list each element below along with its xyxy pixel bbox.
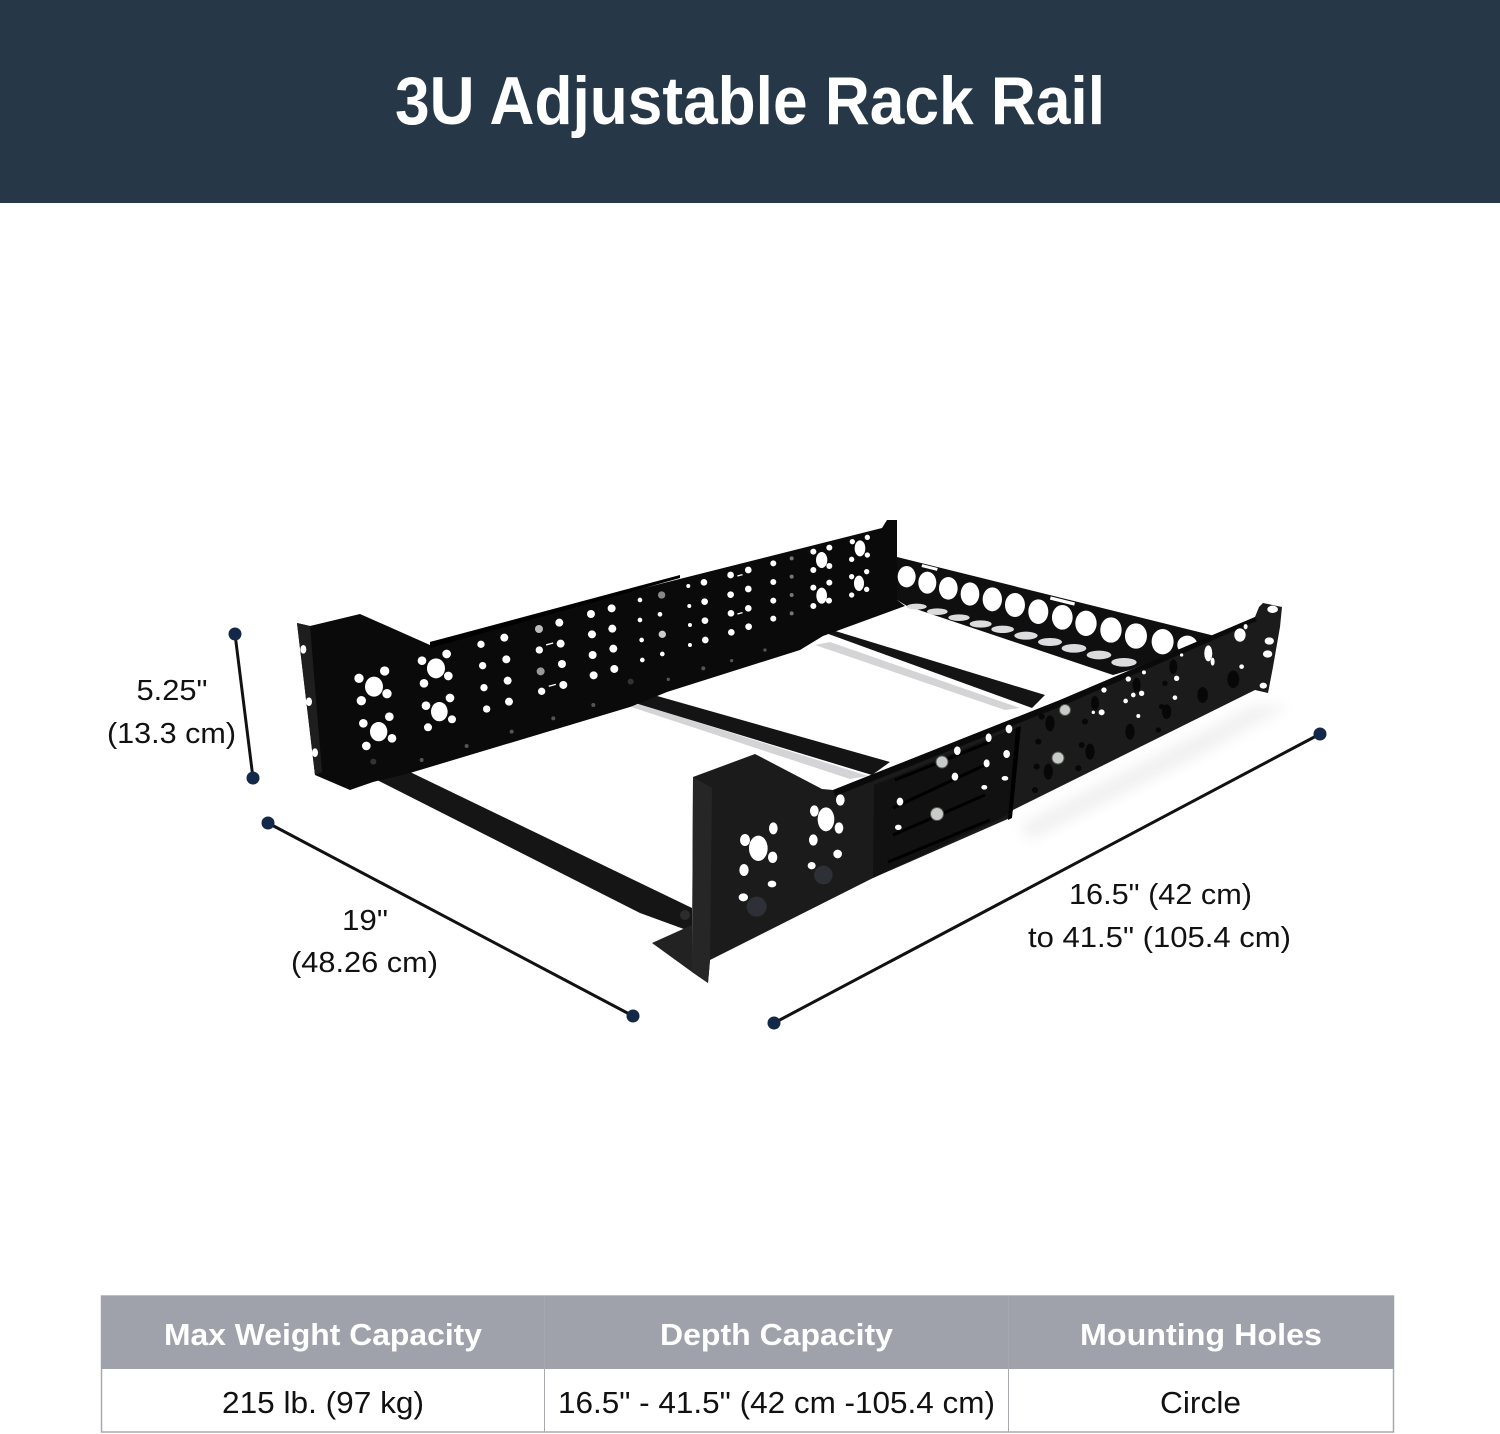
depth dimension: 16.5" (42 cm) <box>1069 879 1252 911</box>
round holes <box>898 564 1197 667</box>
table header row: Mounting Holes <box>1080 1317 1322 1352</box>
width dimension: (48.26 cm) <box>291 947 438 979</box>
width dimension: 19" <box>342 905 388 937</box>
front right rail <box>680 603 1282 983</box>
product illustration: rack rail <box>297 520 1290 983</box>
table header row <box>101 1296 1394 1369</box>
left rail ear flange <box>297 623 322 775</box>
left rail holes <box>300 560 776 757</box>
front base tab <box>652 925 692 972</box>
left rail far holes <box>790 535 870 615</box>
height dimension: (13.3 cm) <box>107 718 236 750</box>
title: 3U Adjustable Rack Rail <box>395 63 1105 139</box>
bolts <box>930 704 1070 820</box>
table header row: Depth Capacity <box>660 1317 894 1352</box>
left rail top lip <box>430 575 680 648</box>
table data row: Circle <box>1160 1385 1241 1420</box>
rear cross rods <box>625 630 1045 775</box>
table header row: Max Weight Capacity <box>164 1317 483 1352</box>
plate slots <box>888 742 990 862</box>
height dimension <box>107 628 260 784</box>
rod end nut <box>680 910 690 920</box>
floor reflection <box>1020 705 1290 840</box>
mid and rear plate holes <box>1032 606 1278 793</box>
sliding plate <box>873 727 1018 878</box>
front ear flange <box>692 777 712 983</box>
front left cross rod <box>373 772 692 932</box>
mid plate seam <box>1008 726 1021 820</box>
left rail <box>297 520 905 790</box>
table data row: 215 lb. (97 kg) <box>222 1385 424 1420</box>
front rail top lip <box>833 617 1257 796</box>
table data row: 16.5" - 41.5" (42 cm -105.4 cm) <box>558 1385 995 1420</box>
dim flange holes <box>370 648 767 765</box>
depth dimension <box>768 728 1326 1030</box>
height dimension: 5.25" <box>136 675 208 707</box>
specifications table <box>101 1296 1394 1432</box>
rod reflections <box>628 642 1020 779</box>
title banner <box>0 0 1500 203</box>
front ear holes <box>739 725 1012 917</box>
depth dimension: to 41.5" (105.4 cm) <box>1028 922 1291 954</box>
width dimension <box>262 816 640 1022</box>
rear tube panel <box>897 557 1215 675</box>
table data row <box>222 1385 1241 1420</box>
